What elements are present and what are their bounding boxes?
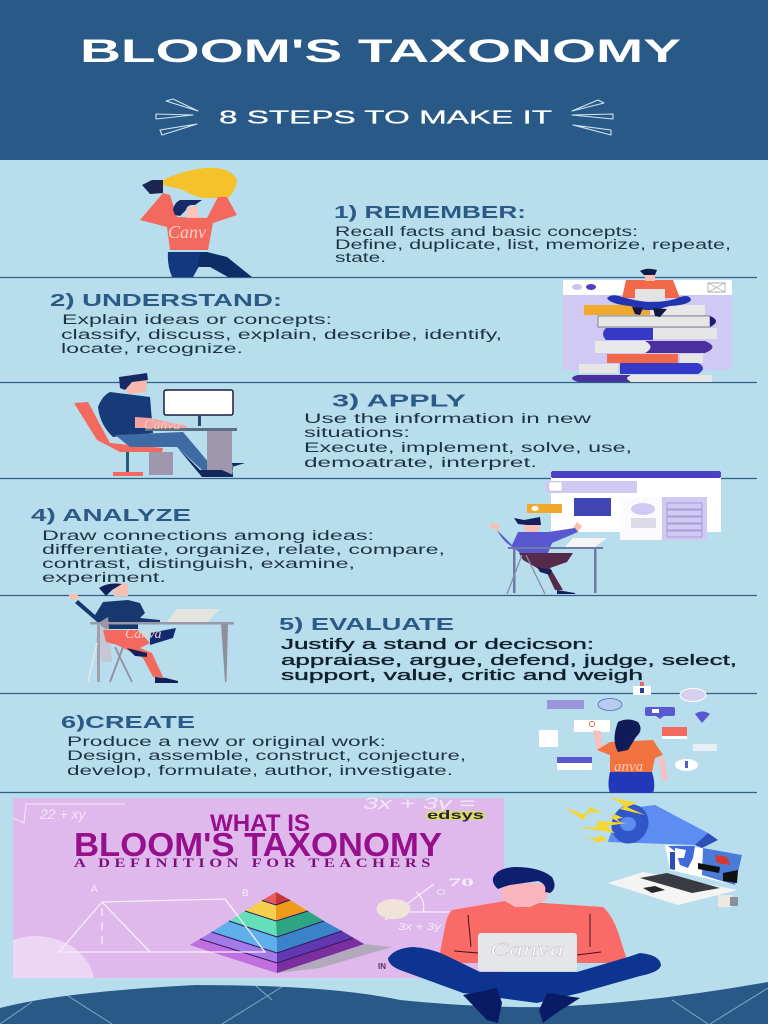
bottom wave — [0, 982, 768, 1024]
step 3 text: demoatrate, interpret. — [304, 455, 537, 470]
illustration: man at desktop — [74, 373, 245, 477]
step 3 text: Execute, implement, solve, use, — [304, 440, 632, 455]
step 2 text: classify, discuss, explain, describe, identify, — [61, 327, 502, 342]
step 1 text: Recall facts and basic concepts: — [335, 224, 638, 239]
icon: right burst — [572, 100, 613, 135]
step 1 text: Define, duplicate, list, memorize, repeate, — [335, 237, 731, 252]
step 4 text: experiment. — [42, 570, 166, 585]
step 2 text — [50, 290, 502, 356]
step 4 text: contrast, distinguish, examine, — [42, 556, 355, 571]
illustration: man with laptop cross-legged: Canva — [490, 939, 564, 961]
step 4 text: differentiate, organize, relate, compare, — [42, 542, 445, 557]
embedded poster: what is Bloom's Taxonomy: 3x + 3y — [398, 922, 442, 933]
poster title: A DEFINITION FOR TEACHERS — [74, 856, 435, 870]
step 5 text: 5) EVALUATE — [279, 614, 454, 634]
illustration: man at desktop: Canva — [144, 418, 181, 433]
illustration: woman with social icons: anva — [614, 759, 643, 775]
poster title: WHAT IS — [210, 810, 310, 837]
step 4 text — [31, 505, 445, 585]
illustration: man with light bulb — [140, 168, 252, 277]
illustration: megaphone and laptop — [564, 797, 742, 907]
title: BLOOM'S TAXONOMY — [80, 33, 681, 69]
step 6 text: Produce a new or original work: — [67, 734, 386, 749]
embedded poster: what is Bloom's Taxonomy: B — [242, 888, 249, 899]
step 4 text: Draw connections among ideas: — [42, 528, 374, 543]
step 6 text: develop, formulate, author, investigate. — [67, 763, 453, 778]
step 3 text — [304, 390, 632, 470]
embedded poster: what is Bloom's Taxonomy — [13, 794, 504, 978]
illustration: woman at desk: Canva — [125, 627, 162, 642]
step 6 text — [61, 712, 466, 778]
header band — [0, 0, 768, 160]
embedded poster: what is Bloom's Taxonomy: 22 + xy — [39, 806, 87, 822]
embedded poster: what is Bloom's Taxonomy: C — [271, 953, 278, 964]
poster geometry sketch — [59, 884, 450, 952]
poster logo — [426, 808, 485, 822]
step 1 text: 1) REMEMBER: — [334, 202, 526, 222]
embedded poster: what is Bloom's Taxonomy: IN — [378, 962, 386, 971]
subtitle: 8 STEPS TO MAKE IT — [219, 108, 552, 128]
step 6 text: 6)CREATE — [61, 712, 195, 732]
illustration: woman with web windows — [489, 471, 721, 594]
icon: left burst — [156, 99, 198, 135]
poster title — [74, 810, 442, 870]
poster logo: edsys — [427, 808, 485, 822]
section dividers — [0, 278, 757, 792]
step 5 text — [279, 614, 737, 684]
lightning bolts — [564, 797, 645, 843]
step 2 text: locate, recognize. — [61, 341, 243, 356]
embedded poster: what is Bloom's Taxonomy: 70 — [448, 875, 474, 889]
embedded poster: what is Bloom's Taxonomy: A — [91, 884, 98, 895]
step 3 text: situations: — [304, 425, 410, 440]
illustration: woman with social icons — [539, 682, 717, 793]
embedded poster: what is Bloom's Taxonomy: 3x + 3y = — [363, 794, 475, 813]
step 2 text: 2) UNDERSTAND: — [50, 290, 282, 310]
step 5 text: Justify a stand or decicson: — [281, 637, 594, 653]
laptop — [608, 845, 742, 907]
megaphone — [668, 846, 695, 868]
step 2 text: Explain ideas or concepts: — [62, 312, 332, 327]
step 3 text: Use the information in new — [304, 411, 591, 426]
illustration: woman at desk — [68, 583, 234, 683]
step 5 text: appraiase, argue, defend, judge, select, — [281, 653, 737, 669]
poster title: BLOOM'S TAXONOMY — [74, 826, 442, 863]
illustration: man with light bulb: Canv — [168, 222, 206, 242]
step 1 text — [334, 202, 731, 265]
step 4 text: 4) ANALYZE — [31, 505, 191, 525]
step 5 text: support, value, critic and weigh — [281, 668, 643, 684]
step 1 text: state. — [335, 250, 386, 265]
step 6 text: Design, assemble, construct, conjecture, — [67, 748, 466, 763]
step 3 text: 3) APPLY — [332, 390, 467, 410]
illustration: man with laptop cross-legged — [388, 867, 661, 1023]
illustration: person on books — [563, 269, 732, 382]
pyramid chart — [190, 892, 392, 973]
